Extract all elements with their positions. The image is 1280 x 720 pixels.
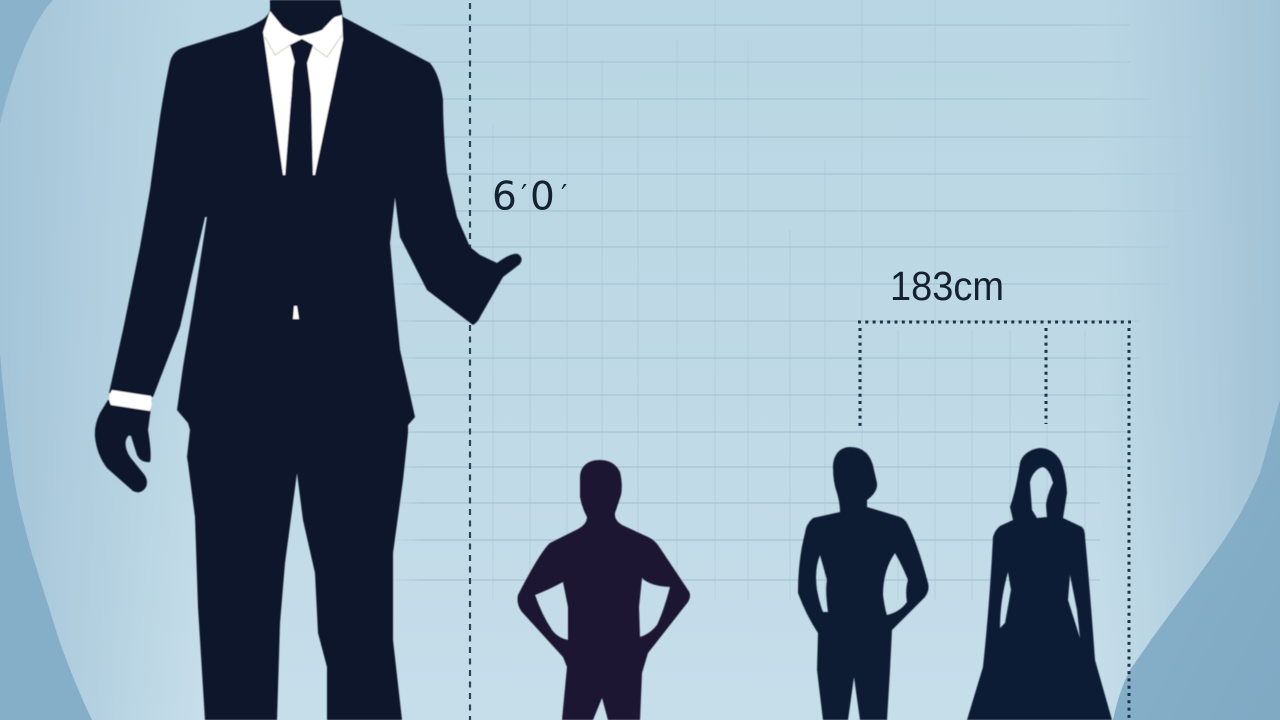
white shirt bbox=[263, 11, 343, 175]
silhouette: middle man bbox=[518, 460, 690, 720]
label: 6 foot 0: ′ bbox=[561, 178, 567, 211]
jacket button gap bbox=[293, 306, 299, 319]
label: 6 foot 0: ′ bbox=[521, 178, 527, 211]
silhouette: giant man in suit bbox=[95, 0, 522, 720]
dotted bracket: 183cm bbox=[858, 322, 1131, 720]
label: 6 foot 0: 6 bbox=[492, 174, 517, 220]
label: 183cm: 183cm bbox=[890, 263, 1004, 309]
necktie bbox=[285, 39, 313, 178]
silhouette: woman in gown bbox=[967, 448, 1112, 720]
suit jacket and trousers bbox=[109, 0, 522, 720]
silhouette: right man bbox=[798, 447, 929, 720]
label: 6 foot 0: 0 bbox=[530, 174, 555, 220]
measurement grid bbox=[390, 0, 1195, 600]
dashed height line bbox=[469, 3, 471, 720]
head and neck bbox=[270, 0, 340, 36]
collar lines bbox=[265, 35, 342, 57]
left hand bbox=[95, 400, 152, 492]
shirt cuff bbox=[109, 390, 152, 411]
